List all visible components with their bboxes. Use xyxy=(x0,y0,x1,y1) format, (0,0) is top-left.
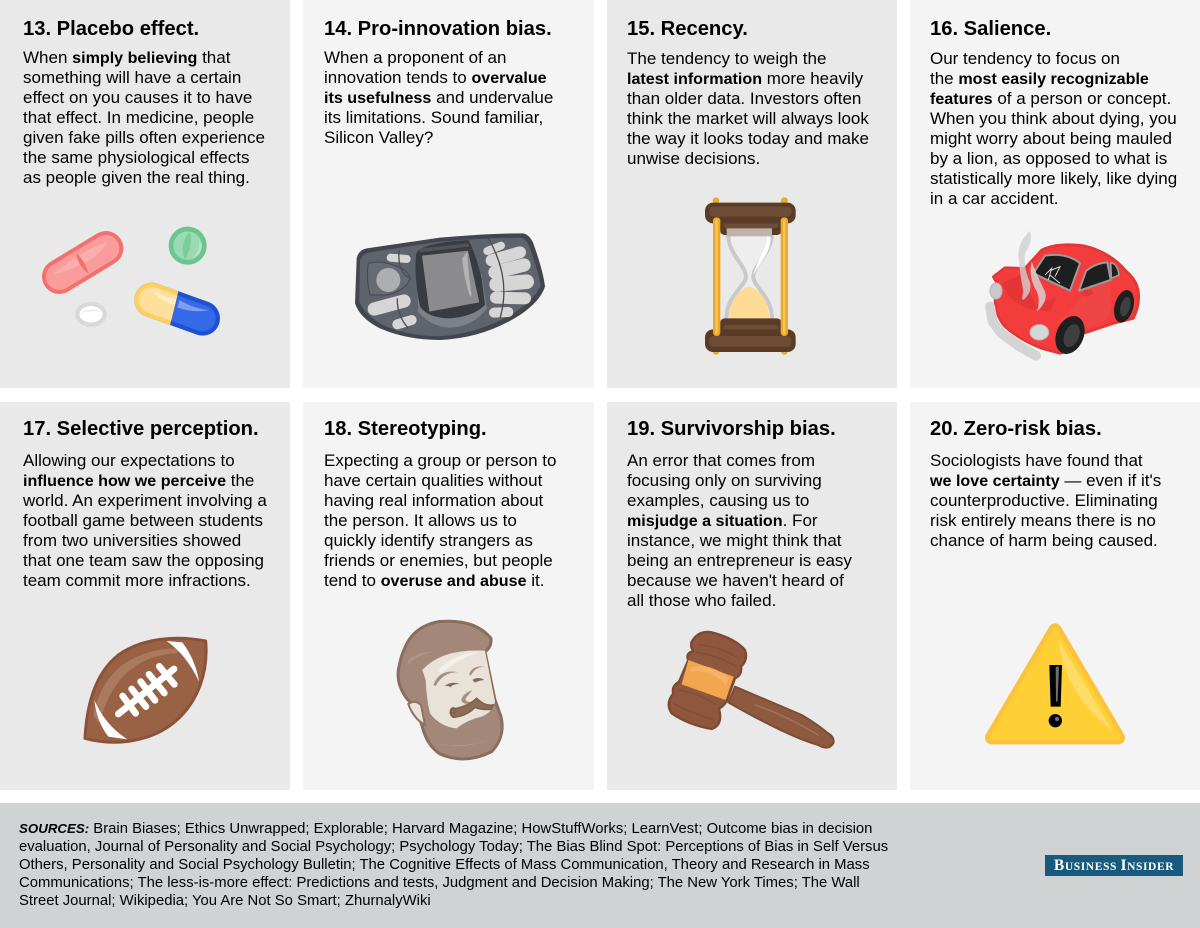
icon: handheld phone xyxy=(355,233,546,340)
text: selective perception description: football game between students xyxy=(23,511,263,530)
icon: pills xyxy=(42,226,220,336)
icon: hourglass xyxy=(705,197,796,355)
text: placebo effect description xyxy=(23,48,265,187)
heading: selective perception: 17. Selective perception. xyxy=(23,418,259,440)
text: placebo effect description: something will have a certain xyxy=(23,68,241,87)
panel: 13 placebo effect xyxy=(0,0,290,388)
text: selective perception description: world. An experiment involving a xyxy=(23,491,267,510)
text: recency description: unwise decisions. xyxy=(627,149,760,168)
text: pro-innovation description xyxy=(324,48,553,147)
panel: 14 pro-innovation bias xyxy=(303,0,594,388)
text: salience description: by a lion, as opposed to what is xyxy=(930,149,1167,168)
text: sources list xyxy=(19,821,888,909)
text: survivorship description: focusing only on surviving xyxy=(627,471,822,490)
text: salience description xyxy=(930,49,1177,208)
text: sources list: Street Journal; Wikipedia; You Are Not So Smart; ZhurnalyWiki xyxy=(19,893,431,909)
text: placebo effect description: given fake pills often experience xyxy=(23,128,265,147)
panel: 19 survivorship bias xyxy=(607,402,897,790)
text: placebo effect description: that effect. In medicine, people xyxy=(23,108,254,127)
panel: 15 recency xyxy=(607,0,897,388)
text: zero-risk description: counterproductive. Eliminating xyxy=(930,491,1158,510)
text: survivorship description: An error that comes from xyxy=(627,451,815,470)
text: zero-risk description xyxy=(930,451,1161,550)
heading: stereotyping: 18. Stereotyping. xyxy=(324,418,487,440)
text: selective perception description: from two universities showed xyxy=(23,531,241,550)
text: recency description: latest information more heavily xyxy=(627,69,863,88)
text: pro-innovation description: its usefulness and undervalue xyxy=(324,88,553,107)
text: survivorship description: examples, causing us to xyxy=(627,491,809,510)
text: recency description: The tendency to weigh the xyxy=(627,49,826,68)
text: placebo effect description: effect on you causes it to have xyxy=(23,88,252,107)
text: stereotyping description: friends or enemies, but people xyxy=(324,551,553,570)
panel: 20 zero-risk bias xyxy=(910,402,1200,790)
text: survivorship description: misjudge a situation. For xyxy=(627,511,818,530)
text: survivorship description: all those who failed. xyxy=(627,591,776,610)
text: survivorship description: being an entrepreneur is easy xyxy=(627,551,852,570)
text: salience description: features of a person or concept. xyxy=(930,89,1171,108)
text: selective perception description: team commit more infractions. xyxy=(23,571,251,590)
text: sources list: evaluation, Journal of Personality and Social Psychology; Psychology Today; The Bias Blind Spot: Perceptions of Bias in Self Versus xyxy=(19,839,888,855)
panel: sources footer xyxy=(0,803,1200,928)
text: zero-risk description: we love certainty — even if it's xyxy=(930,471,1161,490)
text: selective perception description xyxy=(23,451,267,590)
heading: placebo effect: 13. Placebo effect. xyxy=(23,18,199,40)
heading: pro-innovation bias: 14. Pro-innovation bias. xyxy=(324,18,552,40)
text: stereotyping description: having real information about xyxy=(324,491,543,510)
icon: football xyxy=(84,636,208,744)
text: salience description: in a car accident. xyxy=(930,189,1059,208)
text: placebo effect description: as people given the real thing. xyxy=(23,168,250,187)
icon: bearded man's face xyxy=(396,620,504,760)
text: salience description: the most easily recognizable xyxy=(930,69,1149,88)
text: pro-innovation description: innovation tends to overvalue xyxy=(324,68,547,87)
text: sources list: SOURCES: Brain Biases; Ethics Unwrapped; Explorable; Harvard Magazine; HowStuffWorks; LearnVest; Outcome bias in decision xyxy=(19,821,872,837)
heading: salience: 16. Salience. xyxy=(930,18,1051,40)
text: zero-risk description: Sociologists have found that xyxy=(930,451,1143,470)
text: selective perception description: influence how we perceive the xyxy=(23,471,254,490)
text: sources list: Others, Personality and Social Psychology Bulletin; The Cognitive Effects of Mass Communication, Theory and Research in Mass xyxy=(19,857,870,873)
text: selective perception description: Allowing our expectations to xyxy=(23,451,235,470)
panel: 18 stereotyping xyxy=(303,402,594,790)
text: zero-risk description: chance of harm being caused. xyxy=(930,531,1158,550)
text: recency description: the way it looks today and make xyxy=(627,129,869,148)
text: stereotyping description: Expecting a group or person to xyxy=(324,451,556,470)
text: survivorship description: because we haven't heard of xyxy=(627,571,844,590)
text: pro-innovation description: When a proponent of an xyxy=(324,48,506,67)
heading: zero-risk bias: 20. Zero-risk bias. xyxy=(930,418,1102,440)
text: placebo effect description: When simply believing that xyxy=(23,48,230,67)
text: salience description: When you think about dying, you xyxy=(930,109,1177,128)
icon: warning triangle xyxy=(985,623,1125,744)
text: salience description: Our tendency to focus on xyxy=(930,49,1120,68)
icon: gavel xyxy=(668,630,835,749)
text: stereotyping description: have certain qualities without xyxy=(324,471,542,490)
icon: crashed red car xyxy=(985,231,1140,360)
text: stereotyping description xyxy=(324,451,556,590)
panel: 16 salience xyxy=(910,0,1200,388)
panel: 17 selective perception xyxy=(0,402,290,790)
text: survivorship description xyxy=(627,451,852,610)
heading: survivorship bias: 19. Survivorship bias. xyxy=(627,418,836,440)
text: stereotyping description: the person. It allows us to xyxy=(324,511,517,530)
text: sources list: Communications; The less-is-more effect: Predictions and tests, Judgment and Decision Making; The New York Times; The Wall xyxy=(19,875,860,891)
text: placebo effect description: the same physiological effects xyxy=(23,148,249,167)
text: stereotyping description: tend to overuse and abuse it. xyxy=(324,571,544,590)
text: pro-innovation description: its limitations. Sound familiar, xyxy=(324,108,543,127)
text: recency description: think the market will always look xyxy=(627,109,869,128)
text: recency description: than older data. Investors often xyxy=(627,89,861,108)
text: zero-risk description: risk entirely means there is no xyxy=(930,511,1156,530)
logo: Business Insider: BUSINESS INSIDER xyxy=(1054,857,1174,874)
text: recency description xyxy=(627,49,869,168)
text: stereotyping description: quickly identify strangers as xyxy=(324,531,533,550)
text: selective perception description: that one team saw the opposing xyxy=(23,551,264,570)
text: survivorship description: instance, we might think that xyxy=(627,531,842,550)
heading: recency: 15. Recency. xyxy=(627,18,748,40)
text: salience description: statistically more likely, like dying xyxy=(930,169,1177,188)
text: salience description: might worry about being mauled xyxy=(930,129,1172,148)
text: pro-innovation description: Silicon Valley? xyxy=(324,128,433,147)
